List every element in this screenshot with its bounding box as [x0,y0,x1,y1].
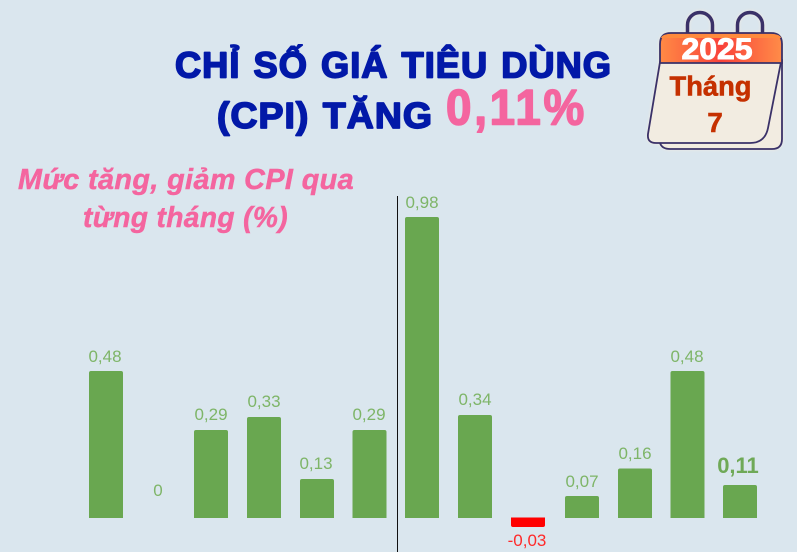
year divider axis [396,196,398,552]
subtitle line 1: Mức tăng, giảm CPI qua [18,164,354,196]
calendar back page [660,60,782,149]
calendar front page [648,62,781,143]
negative bar [511,518,545,527]
calendar month label: Tháng [670,70,752,102]
value labels: 0,29 [352,405,386,424]
calendar month number: 7 [707,107,723,138]
value labels [88,193,759,550]
value labels: 0,48 [88,347,122,366]
bars [89,217,757,518]
subtitle line 2: từng tháng (%) [83,202,288,234]
calendar header highlight [661,34,781,38]
title [175,44,612,136]
calendar year: 2025 [682,33,752,66]
value labels: 0 [153,481,163,500]
value labels: 0,13 [299,454,333,473]
value labels: 0,34 [458,390,492,409]
value labels: 0,48 [670,347,704,366]
icon: calendar [648,12,782,149]
value labels: 0,07 [565,472,599,491]
value labels: 0,98 [405,193,439,212]
value labels: -0,03 [508,531,546,550]
highlighted value: 0,11% [446,80,587,136]
calendar rings [688,12,762,36]
title line 2: (CPI) TĂNG [217,95,433,136]
value labels: 0,33 [247,392,281,411]
bar chart [88,193,759,552]
value labels: 0,16 [618,444,652,463]
chart subtitle [18,164,354,234]
value labels: 0,11 [717,453,759,478]
value labels: 0,29 [194,405,228,424]
title line 1: CHỈ SỐ GIÁ TIÊU DÙNG [175,44,612,86]
